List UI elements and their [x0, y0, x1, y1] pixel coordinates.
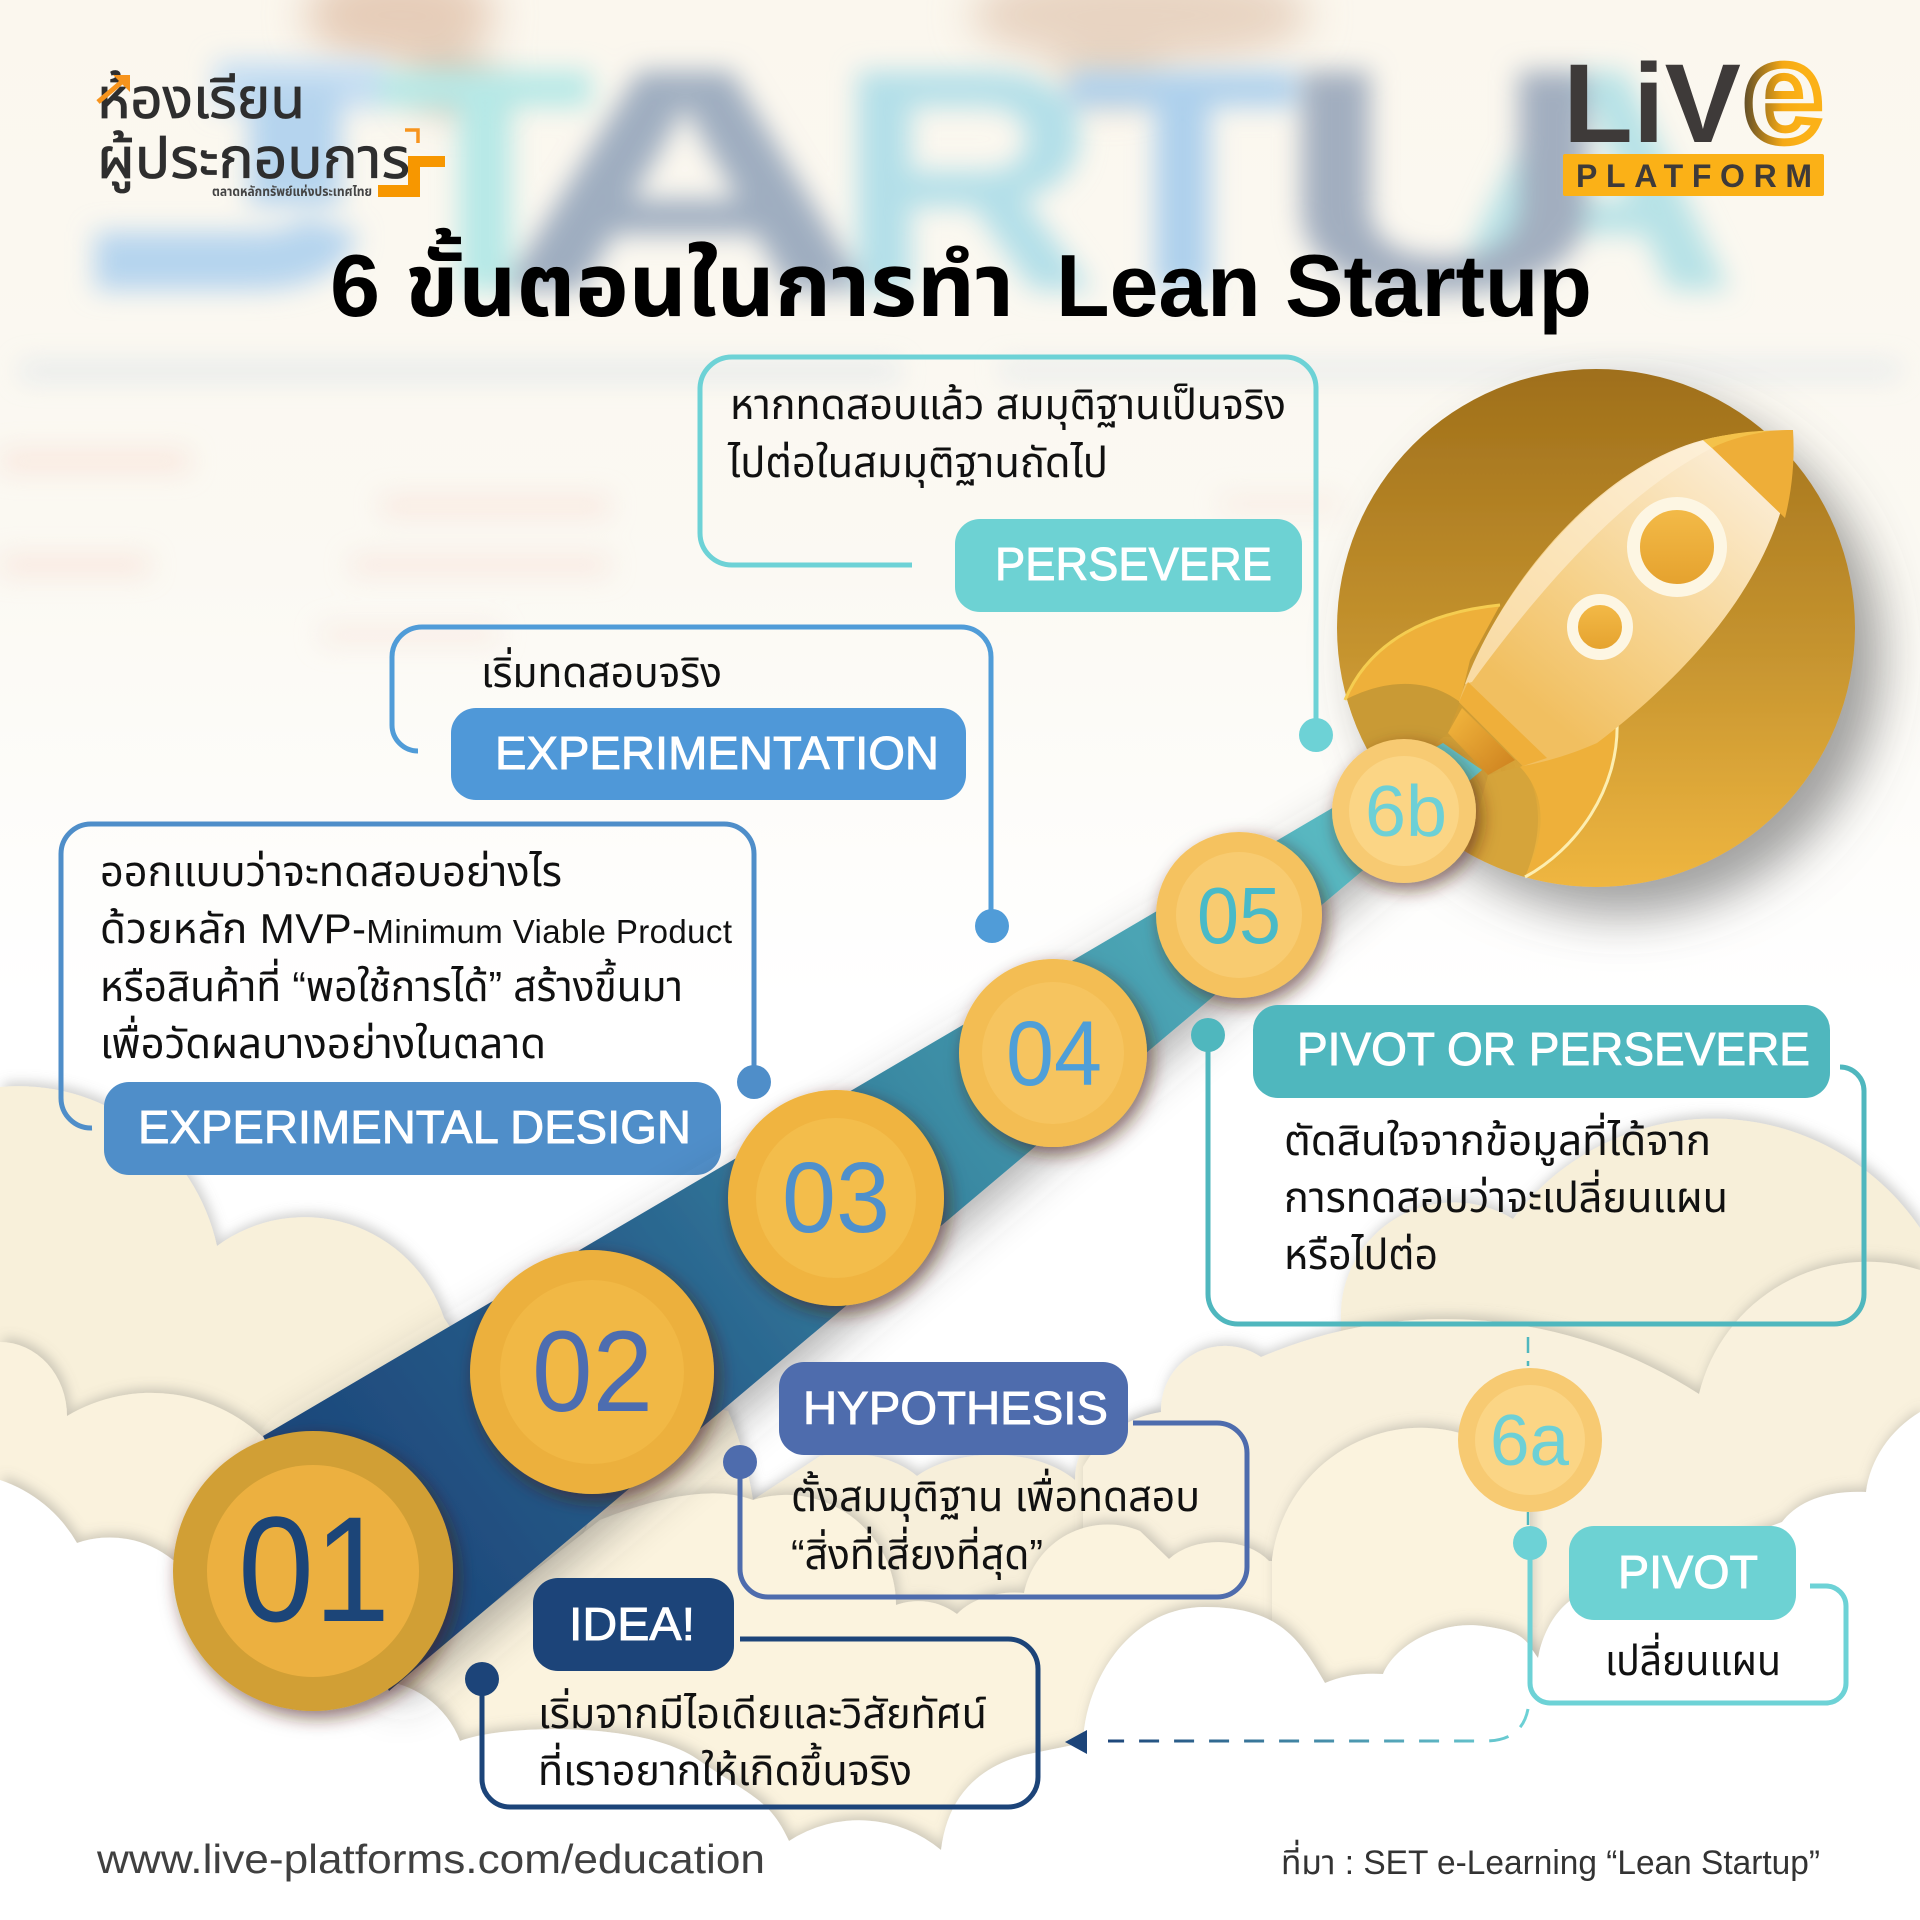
title: 6 ขั้นตอนในการทำ [330, 227, 1014, 335]
step 01 [173, 1431, 453, 1711]
step 6a [1458, 1368, 1602, 1512]
background: blurred STARTUP photo: A [1440, 3, 1740, 358]
logo: ห้องเรียนผู้ประกอบการ: ห้องเรียน [97, 67, 305, 130]
rocket engine nozzle [1448, 708, 1515, 775]
panel: pivot or persevere: การทดสอบว่าจะเปลี่ยนแผน [1284, 1169, 1728, 1221]
step 03 [728, 1090, 944, 1306]
panel: hypothesis: HYPOTHESIS [803, 1382, 1108, 1434]
panel: idea [465, 1578, 1038, 1807]
step 01: 01 [238, 1485, 390, 1653]
step 02 [470, 1250, 714, 1494]
panel: pivot [1513, 1526, 1846, 1703]
rocket base band [1459, 682, 1547, 766]
step 04 [959, 959, 1147, 1147]
background: blurred STARTUP photo: T [375, 3, 595, 358]
panel: persevere: ไปต่อในสมมุติฐานถัดไป [727, 439, 1108, 488]
panel: hypothesis [723, 1362, 1247, 1597]
clouds [0, 1086, 1920, 1920]
step 6a: 6a [1490, 1401, 1570, 1481]
panel: experimentation: เริ่มทดสอบจริง [481, 646, 722, 696]
panel: idea: IDEA! [569, 1598, 695, 1650]
title: Lean Startup [1056, 236, 1592, 335]
rocket fin shadows [1347, 699, 1538, 877]
rocket body highlight [1465, 441, 1712, 684]
panel: hypothesis: ตั้งสมมุติฐาน เพื่อทดสอบ [791, 1468, 1200, 1522]
panel: experimentation [392, 627, 1009, 943]
ribbon path connecting steps [263, 743, 1482, 1691]
rocket nose [1703, 430, 1794, 518]
panel: hypothesis: “สิ่งที่เสี่ยงที่สุด” [791, 1526, 1043, 1580]
panel: experimental design: ออกแบบว่าจะทดสอบอย่างไร [100, 848, 562, 895]
rocket right fin [1520, 720, 1617, 877]
panel: pivot or persevere: PIVOT OR PERSEVERE [1297, 1023, 1810, 1075]
logo: LiVe Platform: LiV [1563, 41, 1741, 166]
panel: experimental design: ด้วยหลัก MVP-Minimum Viable Product [100, 905, 732, 952]
panel: pivot or persevere [1191, 1005, 1864, 1324]
background: blurred STARTUP photo: A [490, 3, 880, 358]
logo: ห้องเรียนผู้ประกอบการ [97, 67, 445, 199]
logo: ห้องเรียนผู้ประกอบการ: ผู้ประกอบการ [97, 127, 410, 193]
panel: persevere [700, 357, 1333, 752]
logo: LiVe Platform [1563, 13, 1824, 196]
step 6b: 6b [1365, 772, 1447, 852]
footer url: www.live-platforms.com/education [96, 1836, 765, 1882]
panel: idea: เริ่มจากมีไอเดียและวิสัยทัศน์ [538, 1687, 987, 1737]
background: blurred STARTUP photo: R [833, 3, 1100, 358]
rocket body [1459, 430, 1793, 766]
panel: experimental design [61, 824, 771, 1175]
panel: pivot: เปลี่ยนแผน [1605, 1632, 1781, 1684]
step 03: 03 [782, 1142, 890, 1254]
background: blurred STARTUP photo: U [1273, 3, 1616, 358]
step 02: 02 [532, 1308, 653, 1436]
panel: pivot or persevere: หรือไปต่อ [1284, 1231, 1438, 1278]
panel: experimental design: EXPERIMENTAL DESIGN [138, 1101, 691, 1153]
rocket window large [1634, 504, 1720, 590]
logo: LiVe Platform: PLATFORM [1576, 158, 1812, 194]
rocket illustration [1330, 430, 1794, 880]
background: blurred STARTUP photo: T [1065, 3, 1300, 358]
title [330, 227, 1592, 335]
logo: ห้องเรียนผู้ประกอบการ: ตลาดหลักทรัพย์แห่งประเทศไทย [212, 184, 372, 199]
step 6b [1332, 739, 1476, 883]
panel: pivot or persevere: ตัดสินใจจากข้อมูลที่ได้จาก [1284, 1112, 1711, 1166]
panel: pivot: PIVOT [1618, 1546, 1758, 1598]
arrow: pivot back to idea [1065, 1709, 1528, 1754]
step 05 [1156, 832, 1322, 998]
dashed connector to 6a [1527, 1337, 1529, 1525]
panel: persevere: PERSEVERE [995, 538, 1272, 590]
panel: persevere: หากทดสอบแล้ว สมมุติฐานเป็นจริง [730, 381, 1286, 430]
step 05: 05 [1197, 871, 1281, 960]
panel: experimentation: EXPERIMENTATION [495, 727, 939, 779]
logo: LiVe Platform: e [1743, 13, 1823, 172]
panel: experimental design: หรือสินค้าที่ “พอใช้การได้” สร้างขึ้นมา [100, 958, 683, 1010]
rocket backdrop circle [1337, 369, 1855, 887]
panel: idea: ที่เราอยากให้เกิดขึ้นจริง [538, 1742, 912, 1794]
step 04: 04 [1006, 1003, 1102, 1105]
panel: experimental design: เพื่อวัดผลบางอย่างในตลาด [100, 1015, 546, 1067]
rocket left fin [1345, 605, 1500, 702]
rocket window small [1572, 600, 1628, 654]
source credit: ที่มา : SET e-Learning “Lean Startup” [1281, 1839, 1820, 1882]
